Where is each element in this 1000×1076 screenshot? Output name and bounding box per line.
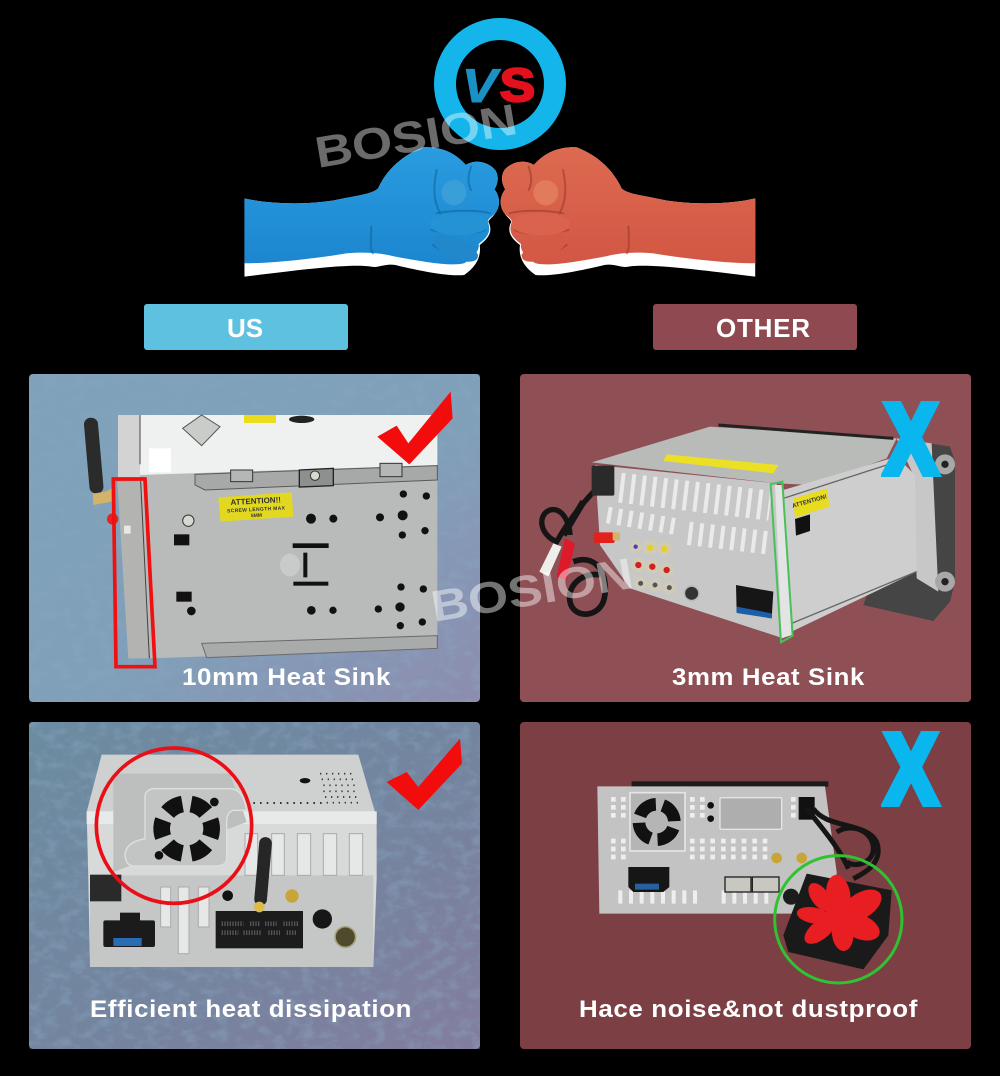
antenna	[83, 417, 118, 525]
fan vent	[634, 799, 679, 845]
VS ring badge	[445, 29, 555, 139]
device photo: flat side plate	[83, 392, 453, 667]
heat sink strip	[775, 485, 792, 638]
warning sticker: SCREW LENGTH MAX	[227, 505, 286, 515]
device photo: angled unit with cables	[539, 425, 955, 642]
device photo: rear view with vented fan	[87, 739, 462, 967]
antenna	[254, 837, 272, 912]
heading button: OTHER	[653, 304, 857, 350]
watermark: lower BOSION: BOSION	[427, 549, 637, 632]
panel: noise and dust (other)	[520, 713, 971, 1049]
left wiring connector	[103, 913, 155, 947]
ports	[725, 877, 779, 892]
caption: Hace noise&not dustproof	[579, 996, 918, 1023]
cables	[542, 482, 605, 614]
VS ring badge: V	[462, 60, 501, 112]
caption: 10mm Heat Sink	[182, 664, 391, 691]
cross mark: X	[885, 383, 937, 494]
panel: 10mm heat sink (us)	[29, 374, 480, 702]
panel: efficient heat dissipation (us)	[29, 722, 480, 1049]
blue fist	[244, 147, 499, 277]
red fist	[501, 147, 755, 277]
red highlight box	[113, 479, 155, 667]
heading button: US	[144, 304, 348, 350]
RCA jacks	[631, 542, 674, 592]
red highlight circle	[96, 748, 252, 903]
external fan	[783, 873, 892, 969]
warning sticker: ATTENTION!!	[230, 495, 281, 507]
cross mark: X	[885, 713, 937, 824]
caption: 3mm Heat Sink	[672, 664, 865, 691]
heading button: OTHER: OTHER	[716, 313, 810, 343]
right wiring connector	[216, 911, 303, 948]
panel: 3mm heat sink (other)	[520, 374, 971, 702]
wiring connector	[628, 867, 669, 892]
green highlight box	[771, 482, 793, 642]
caption: Efficient heat dissipation	[90, 996, 412, 1023]
warning sticker: ATTENTION!	[792, 494, 828, 510]
heading button: US: US	[227, 313, 263, 343]
rear vents	[161, 834, 363, 954]
VS ring badge: S	[500, 60, 535, 111]
green highlight circle	[775, 856, 902, 983]
warning sticker: 5MM	[251, 513, 262, 519]
warning sticker	[792, 488, 829, 518]
device photo: rear view with external fan	[597, 781, 902, 983]
fan vent	[155, 798, 219, 860]
fan cable	[807, 809, 878, 879]
red check mark	[387, 739, 462, 810]
red check mark	[377, 392, 453, 464]
wiring connector	[736, 585, 773, 618]
warning sticker	[218, 492, 293, 522]
watermark: upper BOSION: BOSION	[311, 95, 521, 178]
